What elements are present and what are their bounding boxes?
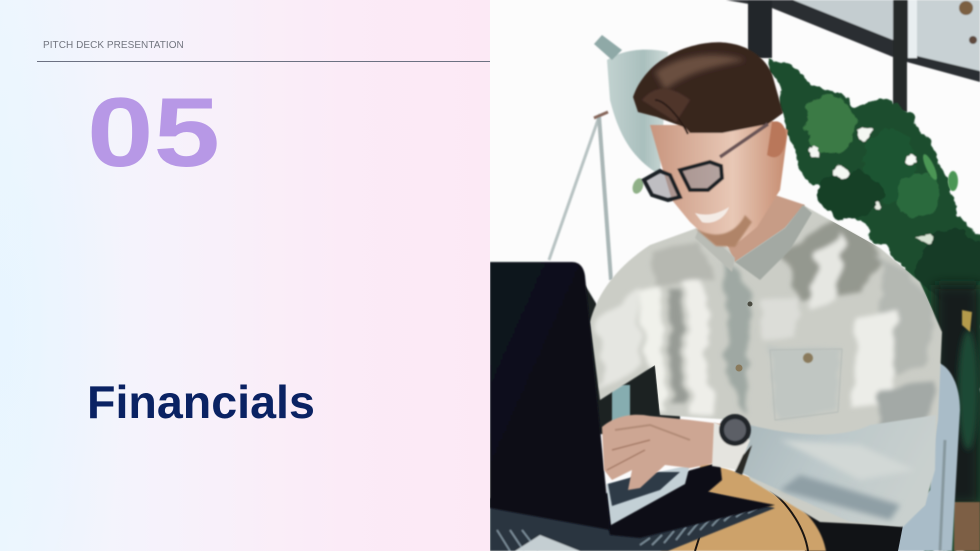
laptop base xyxy=(600,462,775,538)
face xyxy=(650,118,788,246)
laptop xyxy=(490,262,775,538)
glasses xyxy=(644,162,722,200)
section title: Financials xyxy=(87,376,315,428)
shirt pocket xyxy=(770,349,842,420)
dark trousers xyxy=(790,505,905,551)
head xyxy=(633,42,788,247)
window background xyxy=(490,0,980,551)
hair xyxy=(633,42,783,133)
shirt wrinkles xyxy=(598,212,935,440)
plant foliage xyxy=(631,55,980,551)
desk mat with stripes xyxy=(490,490,775,551)
beard shadow xyxy=(695,215,752,247)
eyebrow label: PITCH DECK PRESENTATION xyxy=(43,40,184,51)
floor lamp xyxy=(549,35,668,280)
shirt xyxy=(590,205,942,527)
table xyxy=(660,462,826,551)
neck xyxy=(725,195,805,262)
photo: man smiling while working on a laptop xyxy=(490,0,980,551)
chair xyxy=(885,362,960,551)
sleeve xyxy=(735,415,936,527)
hand on keyboard xyxy=(602,415,722,490)
dark gap behind arm xyxy=(585,285,680,435)
section number: 05 xyxy=(87,77,220,187)
keys xyxy=(608,472,680,506)
ear xyxy=(767,121,786,157)
window frame and frosted panels xyxy=(726,0,980,112)
screen back xyxy=(490,262,610,530)
wristwatch xyxy=(712,414,752,475)
collar xyxy=(695,225,735,272)
table leg xyxy=(612,385,630,425)
keyboard deck xyxy=(606,465,690,525)
header rule xyxy=(37,61,490,62)
panel: left gradient background xyxy=(0,0,490,551)
mouth xyxy=(695,207,729,223)
